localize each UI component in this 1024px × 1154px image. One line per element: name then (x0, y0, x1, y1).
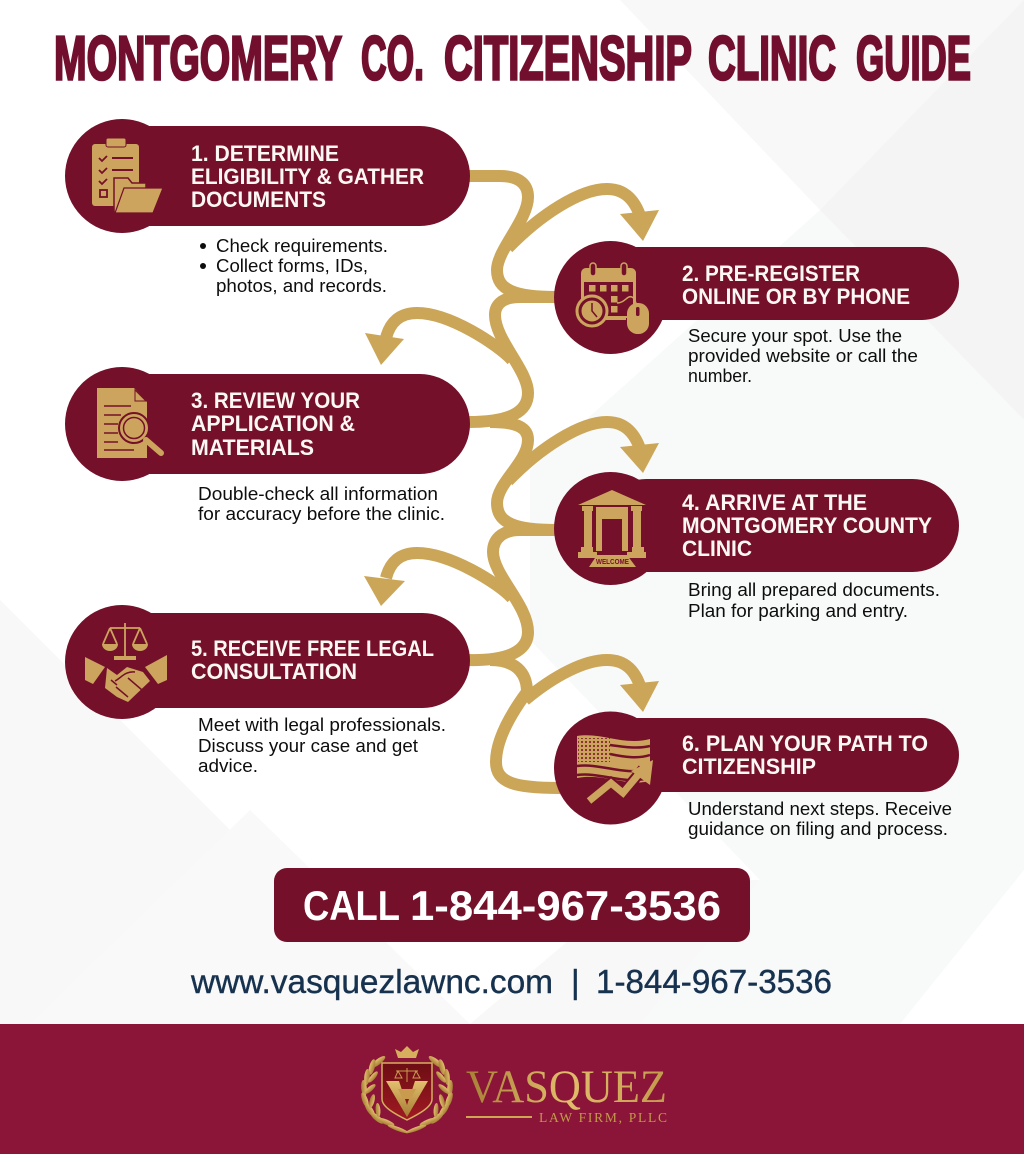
heading: step 4: CLINIC (682, 536, 752, 561)
heading: step 4 (682, 490, 932, 561)
text: step 4 (688, 580, 940, 621)
logo: firm name: VASQUEZ (466, 1061, 667, 1113)
text: step 6: Understand next steps. Receive (688, 799, 952, 819)
heading: step 1: ELIGIBILITY & GATHER (191, 164, 424, 189)
logo: LAW FIRM, PLLC (539, 1110, 667, 1125)
title (54, 24, 971, 94)
text: step 4: Plan for parking and entry. (688, 601, 908, 621)
footer band (0, 1024, 1024, 1154)
heading: step 6: CITIZENSHIP (682, 754, 816, 779)
text: step 1: Collect forms, IDs, (216, 256, 368, 276)
text: step 2: Secure your spot. Use the (688, 326, 902, 346)
text: step 4: Bring all prepared documents. (688, 580, 940, 600)
text: step 5: advice. (198, 756, 258, 776)
step 2 panel (554, 241, 959, 354)
icon: clipboard and folder (92, 138, 163, 213)
icon: courthouse (578, 490, 646, 567)
icon: document and magnifier (97, 388, 161, 458)
heading: step 5: CONSULTATION (191, 659, 357, 684)
text: step 3: for accuracy before the clinic. (198, 504, 445, 524)
step 5 panel (65, 605, 470, 719)
icon: flag and rising arrow (577, 735, 653, 801)
logo: left wreath (360, 1054, 409, 1135)
icon: calendar clock mouse (577, 263, 649, 334)
text: step 1: Check requirements. (216, 236, 388, 256)
call to action button: CALL (303, 882, 400, 929)
icon: courthouse: WELCOME (596, 557, 629, 566)
text: step 1 (200, 236, 388, 296)
icon: scales and handshake (85, 623, 167, 702)
text: step 2 (688, 326, 918, 386)
contact line (190, 963, 832, 1000)
step 4 panel (554, 472, 959, 585)
text: step 6 (688, 799, 952, 839)
heading: step 5: 5. RECEIVE FREE LEGAL (191, 636, 434, 661)
text: step 6: guidance on filing and process. (688, 819, 948, 839)
step 6 panel (554, 712, 959, 824)
heading: step 1 (191, 141, 424, 212)
title: CO. (361, 24, 424, 94)
logo: right wreath (405, 1054, 454, 1135)
logo (360, 1046, 667, 1135)
heading: step 5 (191, 636, 434, 684)
heading: step 3: APPLICATION & (191, 411, 355, 436)
heading: step 4: 4. ARRIVE AT THE (682, 490, 867, 515)
heading: step 3: 3. REVIEW YOUR (191, 388, 360, 413)
heading: step 2: ONLINE OR BY PHONE (682, 284, 910, 309)
heading: step 2: 2. PRE-REGISTER (682, 261, 860, 286)
step 1 panel (65, 119, 470, 233)
heading: step 4: MONTGOMERY COUNTY (682, 513, 932, 538)
heading: step 2 (682, 261, 910, 309)
call to action button (274, 868, 750, 942)
text: step 5 (198, 715, 446, 776)
call to action button: 1-844-967-3536 (410, 882, 721, 929)
heading: step 3 (191, 388, 360, 460)
flow connectors (386, 176, 642, 788)
title: MONTGOMERY (54, 24, 342, 94)
heading: step 1: DOCUMENTS (191, 187, 326, 212)
logo: shield (382, 1063, 432, 1120)
text: step 5: Discuss your case and get (198, 736, 418, 756)
title: CLINIC (708, 24, 836, 94)
heading: step 6 (682, 731, 928, 779)
step 3 panel (65, 367, 470, 481)
arrowheads (364, 210, 659, 712)
logo: crown (395, 1046, 419, 1058)
title: CITIZENSHIP (444, 24, 692, 94)
text: step 2: provided website or call the (688, 346, 918, 366)
contact line: 1-844-967-3536 (596, 963, 832, 1000)
text: step 3: Double-check all information (198, 484, 438, 504)
heading: step 6: 6. PLAN YOUR PATH TO (682, 731, 928, 756)
text: step 3 (198, 484, 445, 524)
text: step 1: photos, and records. (216, 276, 387, 296)
text: step 2: number. (688, 366, 752, 386)
contact line: | (571, 963, 580, 1000)
contact line: www.vasquezlawnc.com (190, 963, 553, 1000)
text: step 5: Meet with legal professionals. (198, 715, 446, 735)
heading: step 3: MATERIALS (191, 435, 314, 460)
heading: step 1: 1. DETERMINE (191, 141, 339, 166)
